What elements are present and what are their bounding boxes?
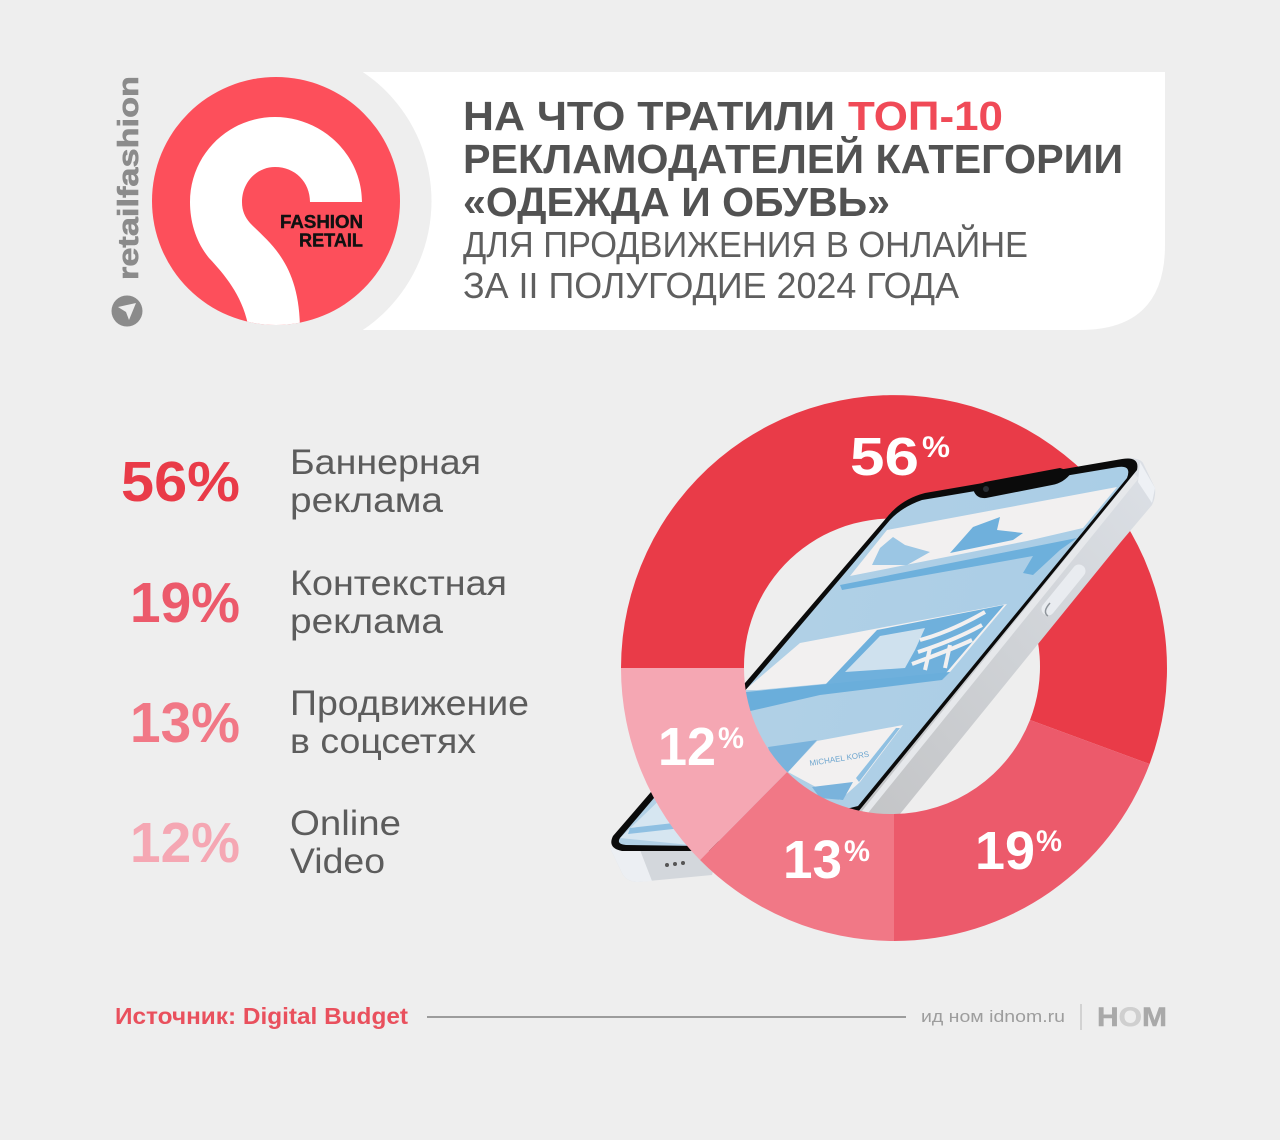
label: 56%: 56	[850, 427, 919, 487]
title	[463, 93, 1123, 225]
legend item: 56% banner	[121, 443, 481, 520]
phone screen	[618, 466, 1128, 846]
legend item: 19% context: реклама	[290, 602, 444, 641]
title: РЕКЛАМОДАТЕЛЕЙ КАТЕГОРИИ	[463, 136, 1123, 182]
publisher logo: НОМ	[1097, 1002, 1167, 1032]
legend item: 13% social: 13%	[130, 691, 240, 755]
donut segment: 13%	[700, 772, 894, 941]
donut labels	[658, 427, 1062, 890]
legend item: 13% social: в соцсетях	[290, 722, 477, 761]
legend item: 12% video	[130, 804, 401, 881]
publisher text: ид ном idnom.ru	[921, 1007, 1065, 1026]
legend item: 19% context: 19%	[130, 571, 240, 635]
phone illustration	[600, 450, 1160, 882]
side button	[1048, 571, 1079, 609]
subtitle: ДЛЯ ПРОДВИЖЕНИЯ В ОНЛАЙНЕ	[463, 223, 1028, 265]
subtitle	[463, 223, 1028, 306]
legend item: 12% video: 12%	[130, 811, 240, 875]
label: 12%: %	[718, 722, 744, 755]
label: 13%: 13	[783, 830, 842, 890]
logo: fashion retail	[152, 77, 400, 330]
legend item: 19% context	[130, 564, 507, 641]
subtitle: ЗА II ПОЛУГОДИЕ 2024 ГОДА	[463, 265, 959, 306]
label: 56%	[850, 427, 950, 487]
label: 13%: %	[844, 835, 870, 868]
title: ТОП-10	[848, 93, 1003, 139]
source: Источник: Digital Budget	[115, 1003, 408, 1029]
logo: fashion retail: RETAIL	[299, 230, 363, 250]
logo: fashion retail: FASHION	[280, 212, 363, 232]
legend item: 56% banner: 56%	[121, 450, 240, 514]
channel name: retailfashion: retailfashion	[113, 76, 145, 280]
label: 12%: 12	[658, 717, 716, 777]
legend item: 12% video: Video	[290, 842, 385, 881]
phone speaker dots	[665, 861, 685, 867]
legend item: 56% banner: реклама	[290, 481, 444, 520]
label: 56%: %	[922, 431, 950, 464]
phone bottom edge	[610, 848, 720, 882]
donut segment: 19%	[894, 720, 1150, 941]
legend item: 13% social: Продвижение	[290, 684, 529, 723]
header panel	[100, 46, 1165, 356]
legend item: 13% social	[130, 684, 529, 761]
legend item: 12% video: Online	[290, 804, 401, 843]
label: 19%	[975, 821, 1062, 881]
donut segment: 12%	[621, 668, 787, 860]
donut segment: 56%	[621, 395, 1167, 764]
legend item: 56% banner: Баннерная	[290, 443, 481, 482]
icon: telegram	[112, 296, 142, 326]
title: «ОДЕЖДА И ОБУВЬ»	[463, 179, 890, 225]
phone notch	[973, 468, 1072, 498]
label: 19%: %	[1036, 825, 1062, 858]
title: НА ЧТО ТРАТИЛИ	[463, 93, 835, 139]
phone screen: MICHAEL KORS	[809, 750, 870, 768]
label: 12%	[658, 717, 744, 777]
legend item: 19% context: Контекстная	[290, 564, 507, 603]
legend	[121, 443, 529, 881]
label: 13%	[783, 830, 870, 890]
label: 19%: 19	[975, 821, 1035, 881]
